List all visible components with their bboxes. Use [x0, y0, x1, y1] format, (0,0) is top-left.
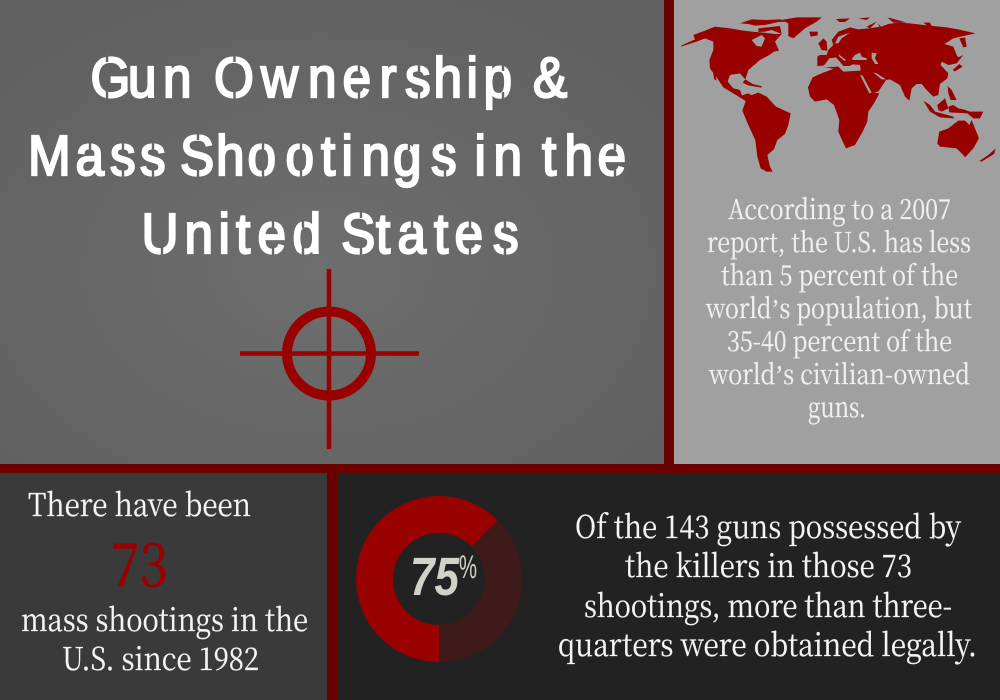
panel: legal guns background: [337, 473, 1000, 700]
title: United States: [141, 203, 519, 266]
text block: world statistic: [705, 187, 972, 425]
title: Gun Ownership &: [91, 47, 567, 110]
text block: world statistic: than 5 percent of the: [721, 253, 958, 293]
panel: world statistic background: [674, 0, 1000, 464]
title: Mass Shootings in the: [28, 125, 626, 188]
donut chart: 75 percent: %: [459, 549, 477, 585]
text block: world statistic: According to a 2007: [728, 187, 951, 227]
panel: mass shootings background: [0, 473, 327, 700]
donut chart: 75 percent: 75: [410, 547, 460, 607]
text block: world statistic: 35-40 percent of the: [727, 319, 952, 359]
text block: world statistic: world’s population, but: [705, 286, 972, 326]
text block: legally obtained guns: shootings, more than three-: [584, 582, 952, 627]
text block: world statistic: guns.: [808, 385, 866, 425]
text block: mass shootings count: [21, 481, 308, 680]
panel: title background: [0, 0, 664, 464]
big number 73: 73: [111, 518, 168, 604]
text block: mass shootings count: There have been: [28, 481, 251, 526]
text block: world statistic: world’s civilian-owned: [708, 352, 970, 392]
icon: crosshair target: [240, 269, 419, 449]
text block: mass shootings count: U.S. since 1982: [62, 635, 259, 680]
text block: legally obtained guns: the killers in those 73: [625, 542, 912, 587]
icon: world map: [681, 17, 996, 172]
text block: mass shootings count: mass shootings in the: [21, 596, 308, 641]
donut chart: 75 percent: [374, 514, 522, 662]
title: [28, 47, 626, 266]
text block: legally obtained guns: [558, 503, 977, 666]
